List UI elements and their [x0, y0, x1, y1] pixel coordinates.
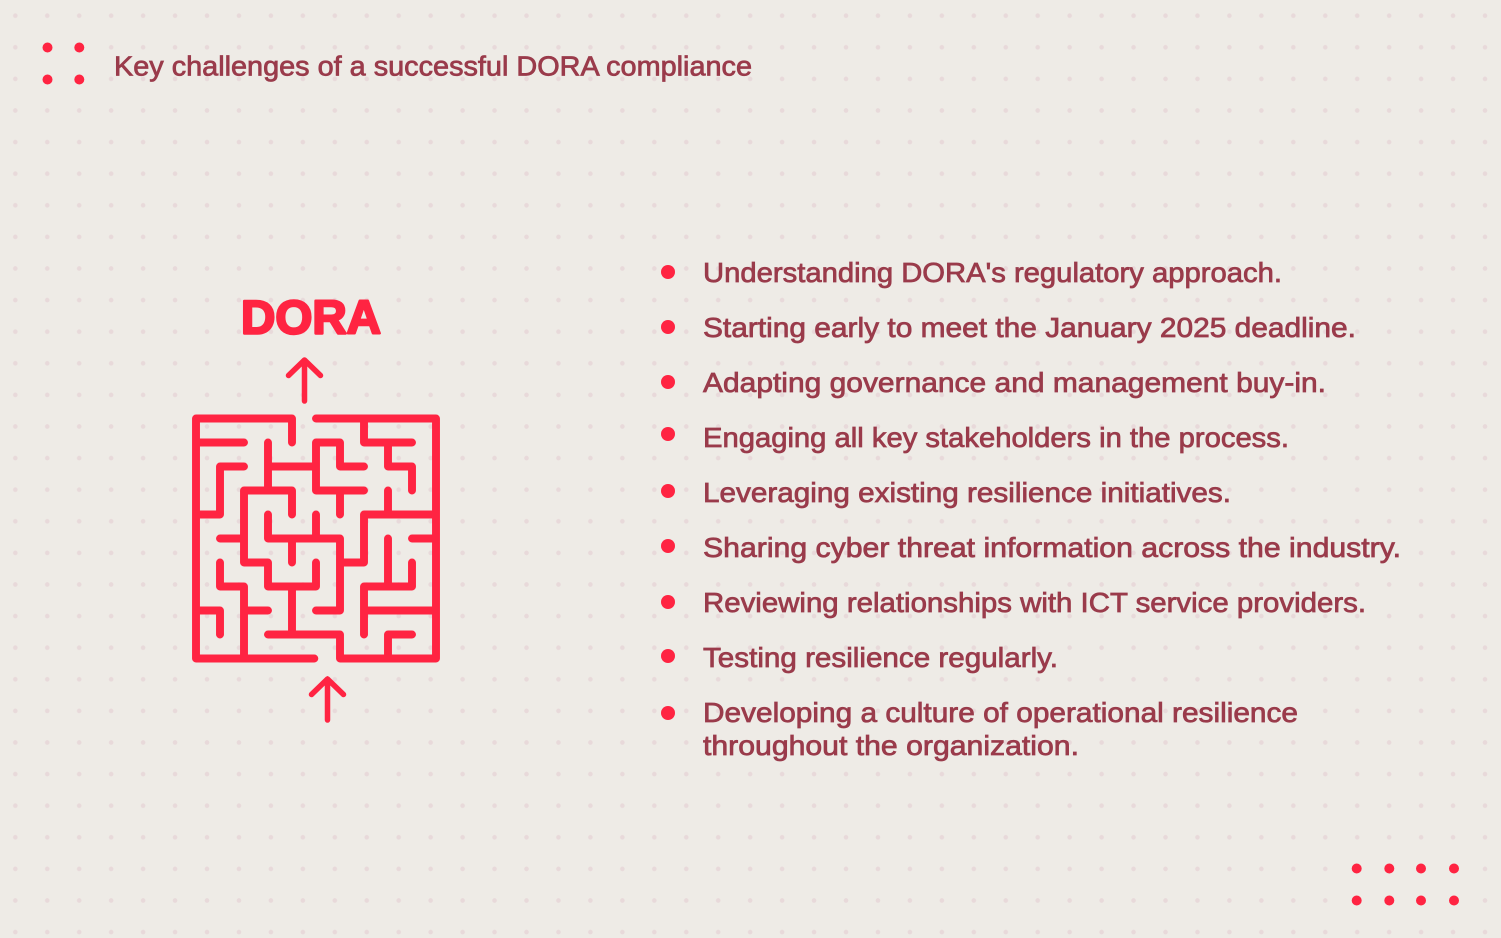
arrow: entrance at bottom of maze	[312, 679, 344, 720]
list item 7: Reviewing relationships with ICT service providers.	[703, 587, 1366, 618]
icon: top-left red dots	[42, 42, 84, 84]
list item 2: Starting early to meet the January 2025 deadline.	[703, 312, 1356, 343]
list item 4: Engaging all key stakeholders in the process.	[703, 422, 1289, 453]
list item 9	[661, 697, 1298, 761]
icon: bottom-right red dots	[1352, 864, 1459, 906]
arrow: exit at top of maze	[288, 360, 320, 401]
list item 9: Developing a culture of operational resilience	[703, 697, 1298, 728]
list item 9: throughout the organization.	[703, 730, 1079, 761]
title: Key challenges of a successful DORA compliance	[114, 50, 752, 82]
list item 3: Adapting governance and management buy-in.	[703, 367, 1326, 398]
heading: DORA: DORA	[241, 290, 381, 344]
list item 6: Sharing cyber threat information across the industry.	[703, 532, 1401, 563]
icon: maze	[196, 418, 436, 658]
list item 5: Leveraging existing resilience initiatives.	[703, 477, 1231, 508]
panel: list of challenges	[661, 257, 1401, 761]
list item 8: Testing resilience regularly.	[703, 642, 1058, 673]
panel: maze illustration	[196, 290, 436, 720]
list item 1: Understanding DORA's regulatory approach.	[703, 257, 1282, 288]
